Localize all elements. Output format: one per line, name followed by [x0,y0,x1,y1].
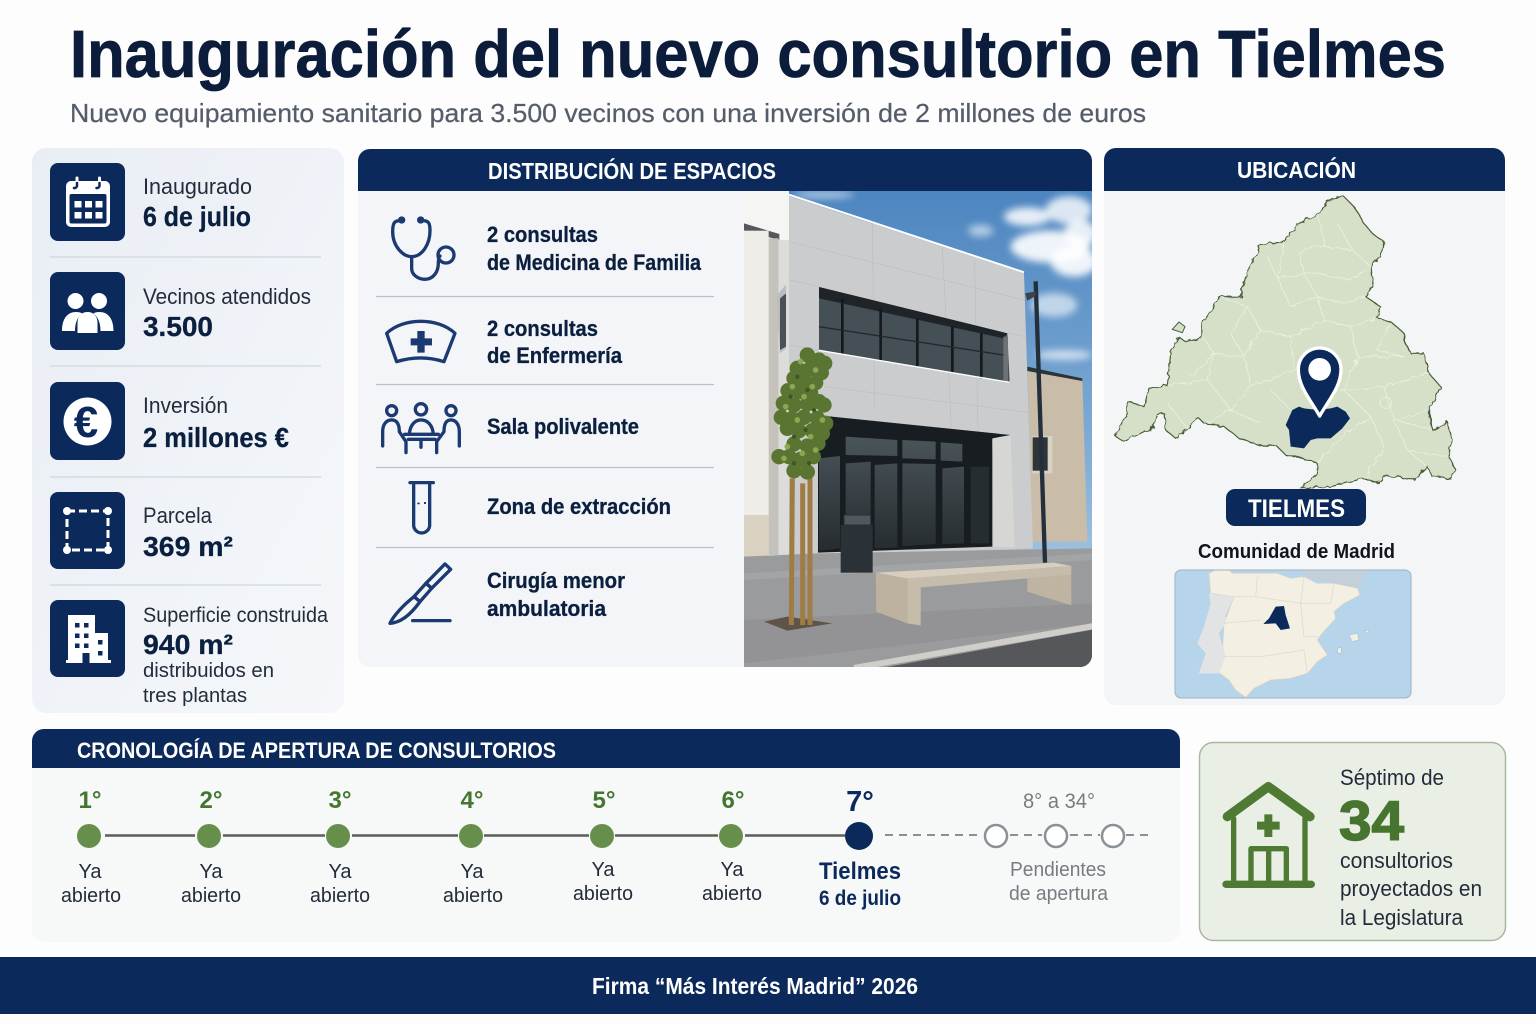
fact: superficie: Superficie construida [143,604,328,627]
row: cirugía: ambulatoria [487,596,607,621]
milestone 6: abierto [702,883,762,905]
fact: superficie: distribuidos en [143,660,274,682]
row: medicina de familia [393,218,702,279]
bench [876,563,1071,579]
pending milestones: Pendientes [1010,859,1106,881]
label: Comunidad de Madrid: Comunidad de Madrid [1198,541,1395,563]
pending milestones: de apertura [1009,883,1109,905]
milestone 2: 2° [200,787,222,814]
map: Spain locator [1175,567,1411,698]
row: medicina de familia: de Medicina de Familia [487,250,702,275]
milestone 4 [443,787,503,907]
icon: scalpel [390,564,451,623]
milestone 7: Tielmes: Tielmes [819,858,901,885]
pending milestones [985,790,1124,905]
callout: séptimo de 34: la Legislatura [1340,905,1464,930]
row: cirugía [390,564,625,623]
milestone 5: 5° [593,787,615,814]
lamp post [1036,281,1045,563]
timeline line [105,834,1148,837]
milestone 4: abierto [443,885,503,907]
entrance [818,416,1011,553]
pending milestones: 8° a 34° [1023,790,1095,813]
milestone 2 [181,787,241,907]
icon: test tube [410,483,433,533]
milestone 6: Ya [721,859,744,881]
icon: euro [64,398,112,447]
fact: superficie [50,600,328,707]
milestone 3: Ya [329,861,352,883]
icon: plot outline [63,507,112,554]
milestone 2: Ya [200,861,223,883]
icon: meeting [383,404,459,453]
icon: people [62,293,114,333]
icon: nurse cap [387,321,455,362]
icon: map pin [1298,348,1341,416]
subtitle: Nuevo equipamiento sanitario para 3.500 vecinos con una inversión de 2 millones de euros [70,98,1146,128]
heading: DISTRIBUCIÓN DE ESPACIOS [488,157,776,184]
row: enfermería: 2 consultas [487,316,598,341]
main volume [789,196,1033,556]
milestone 1: Ya [79,861,102,883]
heading: CRONOLOGÍA DE APERTURA DE CONSULTORIOS [77,738,556,763]
fact: inaugurado: 6 de julio [143,201,251,232]
callout: séptimo de 34: proyectados en [1340,876,1482,901]
row: extracción: Zona de extracción [487,494,671,519]
heading: UBICACIÓN [1237,156,1356,183]
milestone 7: Tielmes [819,786,901,910]
tree [791,477,810,625]
icon: stethoscope [393,218,454,279]
milestone 7: Tielmes: 7° [846,786,874,818]
right wing [1027,367,1087,542]
footer bar: Firma “Más Interés Madrid” 2026 [592,973,918,999]
row: enfermería [387,316,623,368]
fact: inversión: Inversión [143,393,228,418]
ground [744,548,1094,670]
icon: euro: € [74,398,98,447]
fact: parcela: Parcela [143,503,213,528]
panel: distribución de espacios [358,149,1097,670]
fact: inversión: 2 millones € [143,422,289,453]
milestone 1 [61,787,121,907]
milestone 6 [702,787,762,905]
photo: consultorio building [744,190,1097,670]
icon: building [66,615,111,663]
fact: vecinos: 3.500 [143,311,213,342]
milestone 5 [573,787,633,905]
label: Tielmes pill: TIELMES [1248,495,1345,523]
title: Inauguración del nuevo consultorio en Tielmes [70,17,1446,92]
fact: superficie: 940 m² [143,629,233,660]
icon: health centre house [1226,787,1311,884]
milestone 6: 6° [722,787,744,814]
left wing [744,190,789,557]
fact: parcela: 369 m² [143,531,233,562]
icon: calendar [66,178,110,227]
callout: séptimo de 34: consultorios [1340,848,1453,873]
fact: inaugurado [50,163,252,241]
row: medicina de familia: 2 consultas [487,222,598,247]
fact: vecinos: Vecinos atendidos [143,284,311,309]
label: Tielmes pill [1226,489,1366,526]
row: sala polivalente [383,404,639,453]
fact: inaugurado: Inaugurado [143,174,252,199]
milestone 3: abierto [310,885,370,907]
panel: ubicación [1104,148,1505,705]
window band [819,287,1010,382]
callout: séptimo de 34 [1200,742,1506,940]
map: Comunidad de Madrid [1116,195,1456,488]
bin [841,525,873,573]
milestone 5: abierto [573,883,633,905]
milestone 2: abierto [181,885,241,907]
callout: séptimo de 34: 34 [1339,789,1404,852]
row: sala polivalente: Sala polivalente [487,414,639,439]
row: enfermería: de Enfermería [487,343,623,368]
fact: vecinos [50,272,311,350]
milestone 7: Tielmes: 6 de julio [819,887,901,910]
panel: cronología [32,729,1180,942]
milestone 4: Ya [461,861,484,883]
fact: superficie: tres plantas [143,685,247,707]
milestone 3 [310,787,370,907]
fact: inversión [50,382,289,460]
row: cirugía: Cirugía menor [487,568,625,593]
panel: key facts [32,148,344,713]
row: extracción [410,483,671,533]
milestone 3: 3° [329,787,351,814]
fact: parcela [50,492,233,569]
milestone 1: 1° [79,787,101,814]
Tielmes municipality [1286,407,1350,448]
callout: séptimo de 34: Séptimo de [1340,765,1444,790]
milestone 5: Ya [592,859,615,881]
footer bar [0,957,1536,1014]
milestone 4: 4° [461,787,483,814]
milestone 1: abierto [61,885,121,907]
